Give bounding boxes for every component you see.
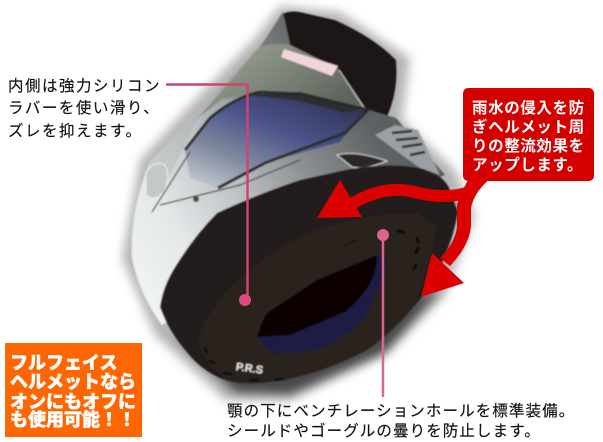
callout line: ventilation hole bbox=[377, 229, 389, 397]
left arrow shaft bbox=[350, 190, 472, 205]
opening dark interior bbox=[257, 255, 377, 337]
neck roll front panel bbox=[197, 213, 437, 383]
down arrow tail bbox=[440, 178, 491, 266]
badge text bbox=[10, 353, 136, 430]
arrow: down bbox=[421, 178, 491, 297]
badge text: ヘルメットなら bbox=[10, 372, 136, 392]
silver shell bbox=[132, 12, 445, 325]
visor back: black inner side bbox=[262, 11, 397, 117]
eye port with inner lining bbox=[185, 92, 368, 188]
callout text: inner silicone rubber: 内側は強力シリコン bbox=[8, 77, 161, 95]
badge text: フルフェイス bbox=[10, 353, 117, 373]
callout text: inner silicone rubber: ラバーを使い滑り、 bbox=[8, 99, 160, 117]
eye port dark seal bbox=[185, 92, 368, 188]
badge text: も使用可能！！ bbox=[10, 409, 136, 430]
logo: P.R.S bbox=[235, 361, 264, 377]
visor hinge plate bbox=[146, 164, 168, 198]
callout text: りの整流効果を bbox=[472, 137, 585, 155]
ventilation dot bbox=[377, 229, 389, 241]
lower cheek panel bbox=[155, 118, 445, 270]
red callout with arrows bbox=[317, 88, 594, 297]
ventilation holes bbox=[205, 231, 418, 380]
opening navy lining bbox=[257, 255, 387, 354]
callout box bbox=[463, 88, 594, 181]
callout text: inner silicone rubber: ズレを抑えます。 bbox=[8, 122, 142, 140]
silver crown band bbox=[146, 12, 283, 190]
badge text: オンにもオフに bbox=[10, 392, 136, 412]
neck roll black band bbox=[160, 165, 458, 383]
lifted visor bbox=[198, 44, 363, 118]
callout dot bbox=[239, 294, 251, 306]
callout text: ぎヘルメット周 bbox=[472, 117, 585, 136]
arrow: to the left bbox=[317, 180, 472, 218]
crown band wider bbox=[150, 46, 262, 165]
callout line: inner silicone rubber bbox=[166, 84, 251, 306]
hinge arm bbox=[152, 152, 300, 212]
forehead vent bbox=[375, 125, 440, 175]
side air slot bbox=[337, 153, 387, 168]
helmet photo bbox=[122, 6, 475, 400]
helmet lower shadow bbox=[175, 290, 440, 394]
dark visor strip bbox=[245, 92, 366, 113]
helmet halo shadow bbox=[122, 6, 475, 400]
callout text bbox=[472, 99, 585, 174]
callout text: inner silicone rubber bbox=[8, 77, 161, 140]
badge background bbox=[5, 343, 142, 437]
visor label bbox=[281, 49, 338, 76]
orange badge bbox=[5, 343, 142, 437]
callout text: アップします。 bbox=[472, 156, 583, 174]
down arrow head bbox=[421, 253, 464, 297]
callout text: ventilation hole bbox=[227, 402, 575, 440]
callout text: 雨水の侵入を防 bbox=[472, 99, 585, 117]
vent slots bbox=[392, 131, 425, 155]
hinge screw bbox=[193, 196, 199, 202]
callout text: ventilation hole: 顎の下にベンチレーションホールを標準装備。 bbox=[227, 402, 575, 420]
callout text: ventilation hole: シールドやゴーグルの曇りを防止します。 bbox=[227, 421, 541, 440]
left arrow head bbox=[317, 180, 362, 218]
